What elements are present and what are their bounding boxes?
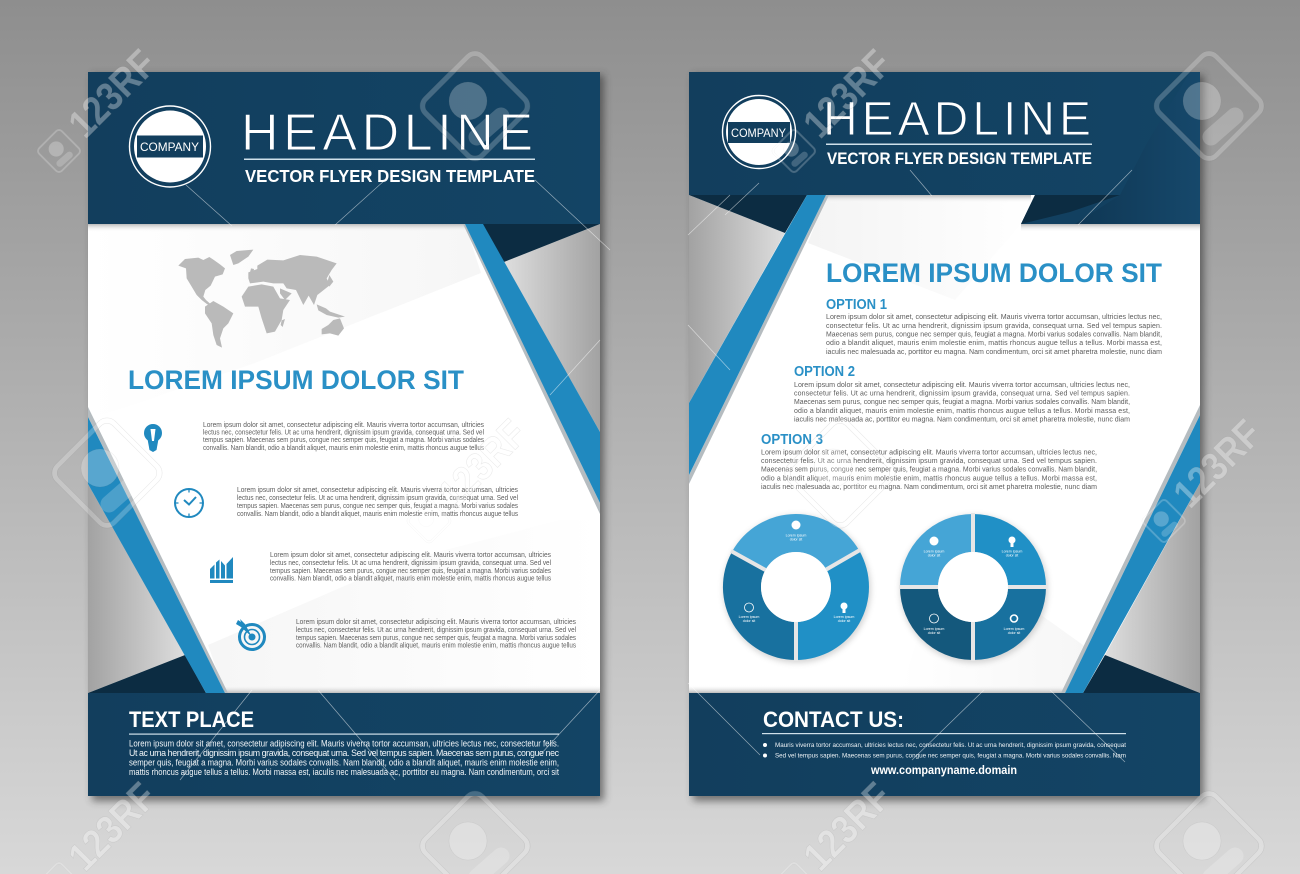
option 1: OPTION 1: [826, 297, 887, 313]
option 3: iaculis nec malesuada ac, porttitor eu magna. Nam condimentum, orci sit amet pharetra molestie, nunc diam: [761, 484, 1097, 491]
chart: four-part donut: dolor sit: [1008, 631, 1020, 635]
subtitle: VECTOR FLYER DESIGN TEMPLATE: [827, 150, 1092, 168]
company logo: COMPANY: [140, 140, 199, 154]
chart: four-part donut: Lorem ipsum: [924, 550, 944, 554]
right dark triangle: [1083, 655, 1200, 693]
option 2: odio a blandit aliquet, mauris enim molestie enim, mattis rhoncus augue tellus a tellus. Morbi massa est,: [794, 408, 1130, 415]
option 2: iaculis nec malesuada ac, porttitor eu magna. Nam condimentum, orci sit amet pharetra molestie, nunc diam: [794, 416, 1130, 424]
watermark: 123RF: [430, 412, 535, 516]
option 2: [794, 364, 1130, 424]
footer text: semper quis, feugiat a magna. Morbi varius sodales convallis. Nam blandit, odio a blandit aliquet, mauris enim molestie enim,: [129, 758, 559, 768]
headline: HEADLINE: [823, 93, 1091, 146]
text block 2: convallis. Nam blandit, odio a blandit aliquet, mauris enim molestie enim, mattis rhoncus augue tellus: [237, 511, 518, 518]
company logo: COMPANY: [731, 126, 786, 140]
header band: [689, 72, 1200, 195]
text block 1: convallis. Nam blandit, odio a blandit aliquet, mauris enim molestie enim, mattis rhoncus augue tellus: [203, 445, 484, 452]
option 1: Lorem ipsum dolor sit amet, consectetur adipiscing elit. Mauris viverra tortor accumsan, ultricies lectus nec,: [826, 314, 1162, 321]
chart: four-part donut: [899, 513, 1048, 663]
option 1: consectetur felis. Ut ac urna hendrerit, dignissim ipsum gravida, consequat urna. Sed vel tempus sapien.: [826, 323, 1162, 330]
footer band: [689, 693, 1200, 796]
text block 4: convallis. Nam blandit, odio a blandit aliquet, mauris enim molestie enim, mattis rhoncus augue tellus: [296, 642, 576, 650]
chart: four-part donut: dolor sit: [928, 554, 940, 558]
text block 4: Lorem ipsum dolor sit amet, consectetur adipiscing elit. Mauris viverra tortor accumsan, ultricies: [296, 619, 576, 626]
footer text: [129, 738, 560, 777]
chart: three-part donut: Lorem ipsum: [834, 615, 854, 619]
icon: clock: [175, 489, 203, 517]
icon: globe: [792, 520, 800, 530]
footer rule: [762, 733, 1126, 734]
text block 1: [203, 422, 484, 452]
icon: clock: [744, 603, 754, 612]
option 1: iaculis nec malesuada ac, porttitor eu magna. Nam condimentum, orci sit amet pharetra molestie, nunc diam: [826, 349, 1162, 356]
chart: four-part donut: Lorem ipsum: [1002, 550, 1022, 554]
right gray triangle: [504, 224, 600, 432]
right dark triangle: [480, 224, 600, 262]
company logo: [130, 106, 210, 187]
headline rule: [826, 144, 1092, 145]
text block 3: [270, 552, 551, 582]
option 3: consectetur felis. Ut ac urna hendrerit, dignissim ipsum gravida, consequat urna. Sed vel tempus sapien.: [761, 458, 1097, 465]
website: www.companyname.domain: [870, 765, 1017, 777]
watermark: 123RF: [1165, 412, 1270, 516]
header fold: [1021, 72, 1200, 224]
text block 3: Lorem ipsum dolor sit amet, consectetur adipiscing elit. Mauris viverra tortor accumsan, ultricies: [270, 552, 551, 559]
text block 3: lectus nec, consectetur felis. Ut ac urna hendrerit, dignissim ipsum gravida, consequat urna. Sed vel: [270, 560, 551, 567]
left dark triangle: [88, 655, 206, 693]
panel: left flyer: [88, 72, 604, 801]
icon: globe: [930, 536, 938, 546]
footer heading: TEXT PLACE: [129, 707, 254, 732]
right blue stripe: [463, 224, 600, 514]
chart: three-part donut: Lorem ipsum: [786, 534, 806, 538]
option 3: Maecenas sem purus, congue nec semper quis, feugiat a magna. Morbi varius sodales convallis. Nam blandit,: [761, 466, 1097, 474]
text block 2: lectus nec, consectetur felis. Ut ac urna hendrerit, dignissim ipsum gravida, consequat urna. Sed vel: [237, 495, 518, 502]
text block 2: [237, 487, 518, 518]
chart: three-part donut: Lorem ipsum: [739, 615, 759, 619]
option 2: Maecenas sem purus, congue nec semper quis, feugiat a magna. Morbi varius sodales convallis. Nam blandit,: [794, 399, 1130, 406]
icon: gear: [1010, 615, 1018, 622]
chart: four-part donut: dolor sit: [928, 631, 940, 635]
chart: three-part donut: [723, 514, 871, 663]
footer text: mattis rhoncus augue tellus a tellus. Morbi massa est, iaculis nec malesuada ac, porttitor eu magna. Nam condimentum, orci sit: [129, 767, 559, 777]
icon: bulb: [840, 602, 848, 613]
right blue stripe: [1061, 405, 1200, 693]
footer band: [88, 693, 600, 796]
contact bullets: Sed vel tempus sapien. Maecenas sem purus, congue nec semper quis, feugiat a magna. Morbi varius sodales convallis. Nam: [775, 752, 1126, 760]
panel: right flyer: [689, 72, 1204, 801]
header band: [88, 72, 600, 224]
subtitle: VECTOR FLYER DESIGN TEMPLATE: [245, 166, 535, 186]
contact bullets: [763, 742, 1126, 760]
text block 1: Lorem ipsum dolor sit amet, consectetur adipiscing elit. Mauris viverra tortor accumsan, ultricies: [203, 422, 484, 429]
icon: target: [236, 619, 264, 650]
world map: [178, 250, 345, 348]
option 1: Maecenas sem purus, congue nec semper quis, feugiat a magna. Morbi varius sodales convallis. Nam blandit,: [826, 332, 1162, 338]
option 1: [826, 297, 1162, 356]
section heading: LOREM IPSUM DOLOR SIT: [826, 258, 1162, 288]
text block 1: lectus nec, consectetur felis. Ut ac urna hendrerit, dignissim ipsum gravida, consequat urna. Sed vel: [203, 430, 484, 436]
headline: HEADLINE: [241, 104, 533, 162]
option 2: consectetur felis. Ut ac urna hendrerit, dignissim ipsum gravida, consequat urna. Sed vel tempus sapien.: [794, 390, 1130, 398]
headline rule: [244, 158, 535, 160]
footer text: Ut ac urna hendrerit, dignissim ipsum gravida, consequat urna. Sed vel tempus sapien. Maecenas sem purus, congue nec: [129, 748, 560, 758]
text block 2: Lorem ipsum dolor sit amet, consectetur adipiscing elit. Mauris viverra tortor accumsan, ultricies: [237, 487, 518, 494]
option 3: odio a blandit aliquet, mauris enim molestie enim, mattis rhoncus augue tellus a tellus. Morbi massa est,: [761, 476, 1097, 482]
text block 4: tempus sapien. Maecenas sem purus, congue nec semper quis, feugiat a magna. Morbi varius sodales: [296, 635, 576, 642]
option 3: [761, 432, 1097, 491]
chart: four-part donut: Lorem ipsum: [924, 627, 944, 631]
chart: four-part donut: Lorem ipsum: [1004, 627, 1024, 631]
footer heading: CONTACT US:: [763, 707, 904, 732]
chart: three-part donut: dolor sit: [743, 619, 755, 623]
icon: clock: [930, 614, 938, 623]
footer text: Lorem ipsum dolor sit amet, consectetur adipiscing elit. Mauris viverra tortor accumsan, ultricies lectus nec, consectetur felis.: [129, 738, 559, 748]
company logo: [722, 96, 796, 168]
left dark triangle: [689, 195, 807, 233]
chart: three-part donut: dolor sit: [790, 538, 802, 542]
text block 4: lectus nec, consectetur felis. Ut ac urna hendrerit, dignissim ipsum gravida, consequat urna. Sed vel: [296, 627, 576, 634]
chart: three-part donut: dolor sit: [838, 619, 850, 623]
left blue stripe: [88, 407, 228, 693]
option 2: OPTION 2: [794, 364, 855, 380]
text block 3: tempus sapien. Maecenas sem purus, congue nec semper quis, feugiat a magna. Morbi varius sodales: [270, 568, 551, 575]
text block 2: tempus sapien. Maecenas sem purus, congue nec semper quis, feugiat a magna. Morbi varius sodales: [237, 503, 518, 510]
watermark: 123RF: [795, 42, 900, 146]
icon: light bulb: [144, 424, 162, 452]
chart: four-part donut: dolor sit: [1006, 554, 1018, 558]
footer rule: [129, 734, 559, 735]
left blue stripe: [689, 195, 829, 484]
option 3: Lorem ipsum dolor sit amet, consectetur adipiscing elit. Mauris viverra tortor accumsan, ultricies lectus nec,: [761, 450, 1097, 456]
text block 1: tempus sapien. Maecenas sem purus, congue nec semper quis, feugiat a magna. Morbi varius sodales: [203, 437, 484, 444]
section heading: LOREM IPSUM DOLOR SIT: [128, 365, 464, 395]
text block 3: convallis. Nam blandit, odio a blandit aliquet, mauris enim molestie enim, mattis rhoncus augue tellus: [270, 576, 551, 582]
left gray triangle: [88, 484, 185, 693]
left gray triangle: [689, 195, 785, 403]
right gray triangle: [1105, 483, 1200, 693]
contact bullets: Mauris viverra tortor accumsan, ultricies lectus nec, consectetur felis. Ut ac urna hendrerit, dignissim ipsum gravida, consequat: [775, 742, 1126, 749]
option 2: Lorem ipsum dolor sit amet, consectetur adipiscing elit. Mauris viverra tortor accumsan, ultricies lectus nec,: [794, 382, 1130, 389]
icon: bar chart: [210, 557, 233, 583]
text block 4: [296, 619, 576, 650]
option 1: odio a blandit aliquet, mauris enim molestie enim, mattis rhoncus augue tellus a tellus. Morbi massa est,: [826, 340, 1162, 347]
icon: bulb: [1008, 536, 1016, 547]
watermark: 123RF: [60, 42, 165, 146]
option 3: OPTION 3: [761, 432, 823, 448]
